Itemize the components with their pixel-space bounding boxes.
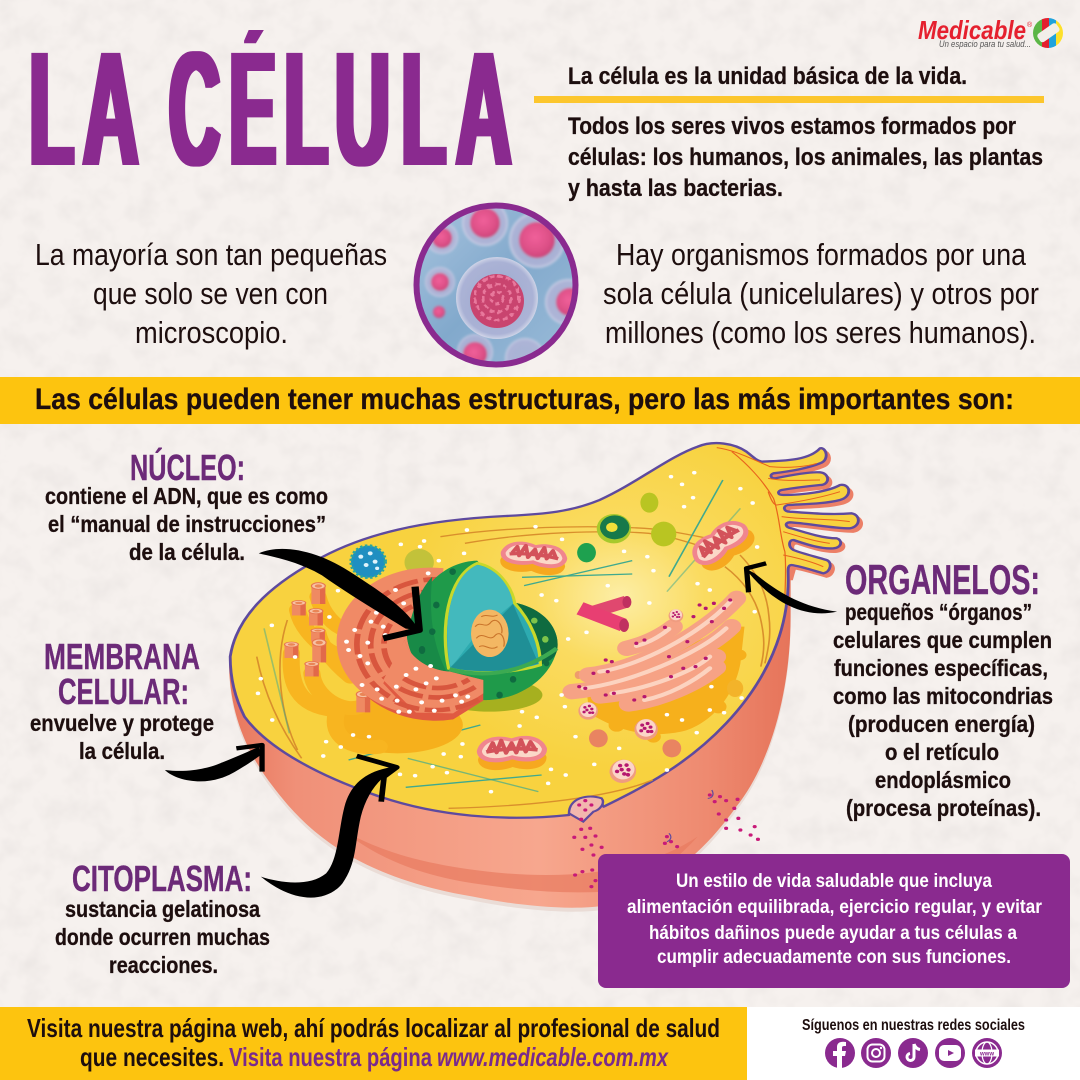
- icon: website globe: [972, 1038, 1002, 1068]
- label: organelos: [833, 556, 1053, 821]
- icon: youtube: [935, 1038, 965, 1068]
- footer: visit website: [0, 1007, 747, 1080]
- cell body: [229, 567, 791, 912]
- smooth endoplasmic reticulum: [284, 583, 463, 753]
- title: C: [169, 17, 220, 200]
- label: organelos: como las mitocondrias: [833, 683, 1053, 709]
- fibers: [257, 527, 770, 808]
- title: L: [402, 17, 446, 200]
- right text: organismos: Hay organismos formados por una: [616, 237, 1027, 272]
- footer: visit website: que necesites.: [80, 1042, 224, 1072]
- rough endoplasmic reticulum: rear part: [337, 568, 483, 721]
- intro text: y hasta las bacterias.: [568, 175, 783, 202]
- rough endoplasmic reticulum: front part with ribosomes: [344, 571, 483, 719]
- title: U: [335, 17, 390, 200]
- label: citoplasma: CITOPLASMA:: [72, 858, 252, 899]
- label: membrana celular: MEMBRANA: [44, 636, 200, 677]
- right text: organismos: [603, 237, 1039, 350]
- callout: estilo de vida saludable: hábitos dañinos puede ayudar a tus células a: [649, 923, 1017, 944]
- microscope image of cells: [414, 202, 578, 368]
- label: organelos: endoplásmico: [875, 767, 1011, 793]
- label: nucleo: contiene el ADN, que es como: [45, 483, 328, 509]
- callout: estilo de vida saludable: cumplir adecuadamente con sus funciones.: [657, 947, 1011, 968]
- filaments: [264, 480, 740, 792]
- icon: facebook: [825, 1038, 855, 1068]
- logo: Medicable: ®: [1027, 21, 1033, 29]
- label: organelos: funciones específicas,: [834, 655, 1048, 681]
- label: citoplasma: sustancia gelatinosa: [65, 896, 260, 922]
- label: nucleo: NÚCLEO:: [130, 446, 245, 488]
- footer: visit website: Visita nuestra página web, ahí podrás localizar al profesional de salud: [27, 1013, 720, 1043]
- label: organelos: (procesa proteínas).: [846, 795, 1041, 821]
- label: membrana celular: [30, 636, 214, 764]
- icon: website globe: www: [979, 1052, 994, 1058]
- label: citoplasma: reacciones.: [109, 952, 218, 978]
- label: organelos: pequeños “órganos”: [845, 599, 1032, 625]
- arrow: membrana: [165, 745, 262, 781]
- label: citoplasma: [55, 858, 270, 978]
- microvilli fibers: [717, 448, 850, 602]
- text: A: [456, 17, 512, 200]
- nucleus: [407, 561, 558, 712]
- logo: Medicable: [918, 18, 1063, 49]
- bottom pore and secreted particles: [569, 790, 760, 888]
- label: citoplasma: donde ocurren muchas: [55, 924, 270, 950]
- microvilli shadow: [750, 452, 862, 580]
- label: membrana celular: envuelve y protege: [30, 710, 214, 736]
- arrow: nucleo: [259, 549, 419, 638]
- label: nucleo: de la célula.: [129, 539, 245, 565]
- left text: microscopio: [35, 237, 387, 350]
- label: organelos: o el retículo: [885, 739, 999, 765]
- callout: estilo de vida saludable: [598, 854, 1070, 988]
- intro text: La célula es la unidad básica de la vida.: [568, 63, 967, 90]
- label: membrana celular: la célula.: [79, 738, 165, 764]
- left text: microscopio: que solo se ven con: [93, 276, 328, 311]
- footer: social media: Síguenos en nuestras redes sociales: [802, 1017, 1025, 1034]
- mitochondria: [476, 514, 761, 771]
- label: organelos: celulares que cumplen: [833, 627, 1052, 653]
- vesicles: [578, 609, 683, 785]
- footer: visit website: Visita nuestra página: [229, 1042, 432, 1072]
- footer: social media: [747, 1007, 1080, 1080]
- title: [31, 30, 512, 167]
- cytoplasm dots: [256, 471, 759, 793]
- spheres and small organelles: [351, 493, 681, 757]
- title: A: [83, 17, 138, 200]
- title: É: [230, 17, 276, 200]
- callout: estilo de vida saludable: alimentación equilibrada, ejercicio regular, y evitar: [627, 897, 1043, 918]
- centrioles: [580, 596, 631, 632]
- arrow: citoplasma: [261, 756, 398, 898]
- label: membrana celular: CELULAR:: [58, 671, 189, 712]
- logo: Medicable: Medicable: [918, 15, 1026, 45]
- callout: estilo de vida saludable: Un estilo de vida saludable que incluya: [676, 871, 992, 892]
- intro text: Todos los seres vivos estamos formados por: [568, 113, 1016, 140]
- title: L: [30, 17, 74, 200]
- cell diagram: [229, 443, 862, 912]
- icon: tiktok: [898, 1038, 928, 1068]
- yellow heading band: [0, 377, 1080, 424]
- logo: Medicable: Un espacio para tu salud...: [939, 39, 1031, 50]
- arrow: organelos: [745, 563, 837, 613]
- label: organelos: (producen energía): [848, 711, 1035, 737]
- icon: instagram: [861, 1038, 891, 1068]
- cytoplasm and membrane with microvilli: [230, 443, 858, 818]
- title: L: [284, 17, 328, 200]
- label: nucleo: el “manual de instrucciones”: [48, 511, 326, 537]
- left text: microscopio: La mayoría son tan pequeñas: [35, 237, 387, 272]
- label: nucleo: [45, 446, 328, 565]
- intro text: [534, 63, 1044, 202]
- footer: visit website: www.medicable.com.mx: [437, 1042, 669, 1072]
- golgi apparatus: [572, 598, 747, 743]
- left text: microscopio: microscopio.: [135, 315, 288, 350]
